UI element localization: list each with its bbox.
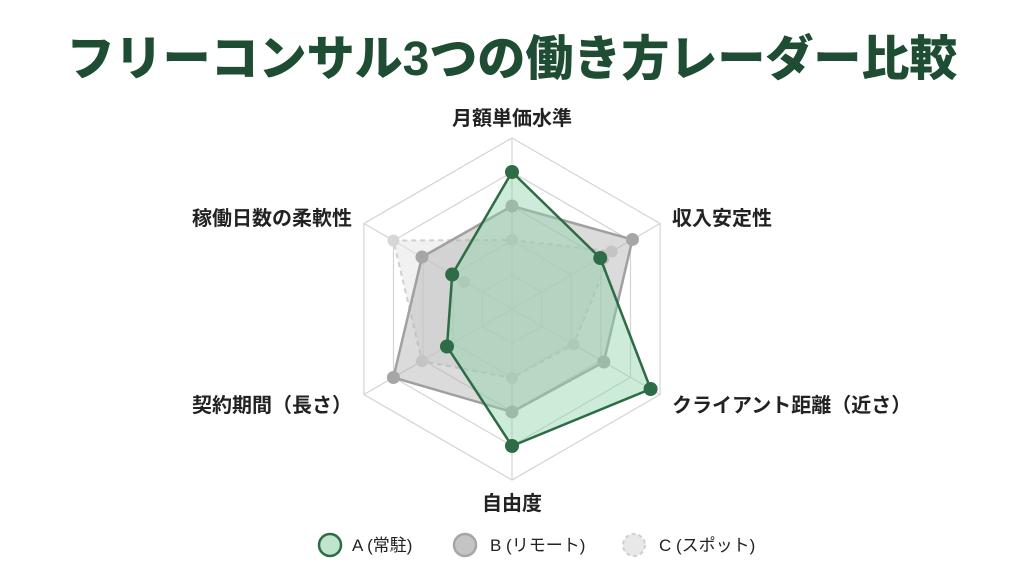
legend — [319, 534, 755, 556]
series B — [387, 200, 639, 418]
title: フリーコンサル3つの働き方レーダー比較 — [67, 32, 957, 86]
axis labels: 稼働日数の柔軟性 — [192, 207, 352, 230]
axis labels: 契約期間（長さ） — [192, 394, 352, 417]
series A — [440, 165, 658, 453]
axis labels: クライアント距離（近さ） — [672, 394, 911, 417]
legend: A (常駐) — [352, 536, 412, 555]
radar chart — [364, 138, 660, 480]
axis labels: 月額単価水準 — [452, 107, 572, 130]
series C — [387, 234, 618, 384]
axis labels: 収入安定性 — [672, 207, 772, 230]
legend: C (スポット) — [659, 536, 755, 555]
axis labels — [192, 107, 911, 515]
legend: B (リモート) — [490, 536, 585, 555]
axis labels: 自由度 — [482, 492, 542, 515]
